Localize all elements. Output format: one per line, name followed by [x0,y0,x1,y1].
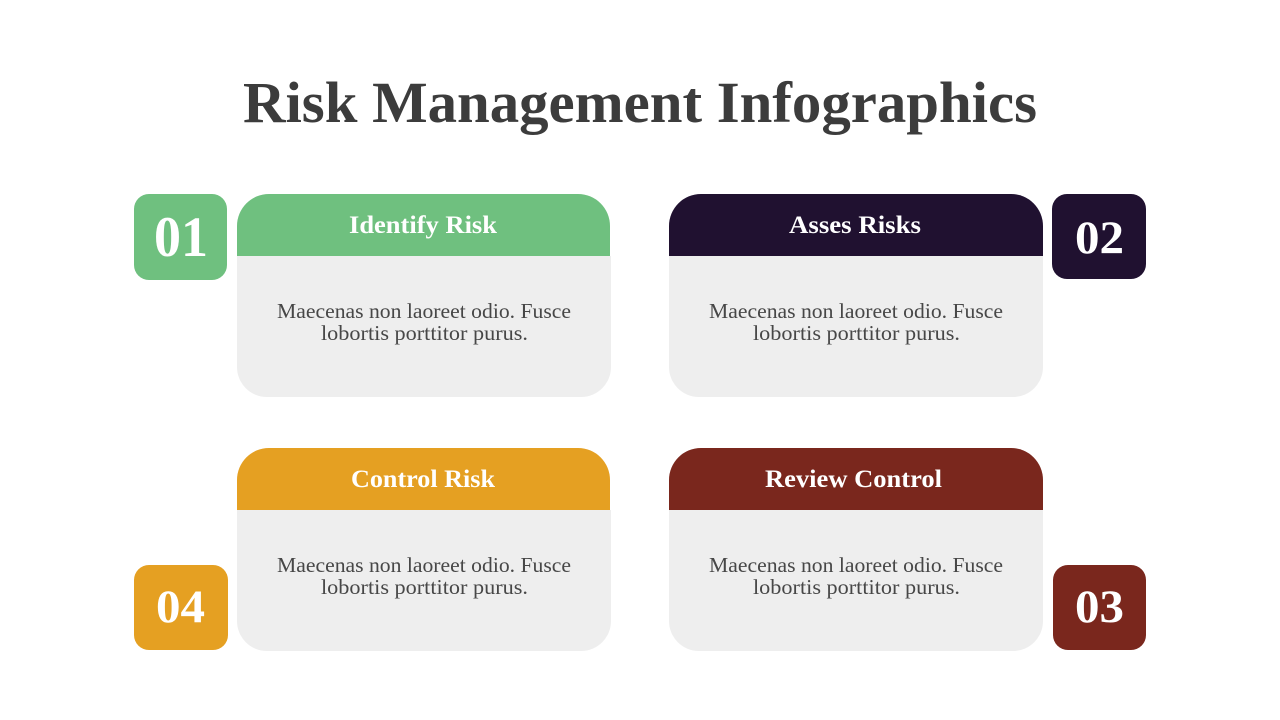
card body [669,256,1043,397]
text block: lobortis porttitor purus. [321,575,528,599]
number badge [1052,194,1146,279]
card body [669,510,1043,651]
number badge [1053,565,1146,650]
panel: 02 asses risks [669,194,1146,397]
title: Risk Management Infographics [243,70,1037,135]
text block: Maecenas non laoreet odio. Fusce [709,299,1003,323]
text block [709,553,1003,599]
number badge: 04 [156,581,205,633]
heading: Identify Risk [349,212,497,239]
number badge [134,194,227,280]
text block: Maecenas non laoreet odio. Fusce [277,299,571,323]
panel: 03 review control [669,448,1146,651]
card body [237,256,611,397]
text block [277,553,571,599]
text block: lobortis porttitor purus. [753,321,960,345]
heading: Review Control [765,466,942,493]
number badge: 03 [1075,581,1124,633]
card body [237,510,611,651]
text block [277,299,571,345]
text block: lobortis porttitor purus. [321,321,528,345]
text block: lobortis porttitor purus. [753,575,960,599]
heading: Control Risk [351,466,495,493]
panel: 04 control risk [134,448,611,651]
card header [669,194,1043,256]
card header [237,448,610,510]
number badge: 01 [154,206,208,269]
card header [669,448,1043,510]
card header [237,194,610,256]
number badge [134,565,228,650]
panel: 01 identify risk [134,194,611,397]
number badge: 02 [1075,212,1124,264]
text block: Maecenas non laoreet odio. Fusce [277,553,571,577]
heading: Asses Risks [789,212,921,239]
text block: Maecenas non laoreet odio. Fusce [709,553,1003,577]
text block [709,299,1003,345]
